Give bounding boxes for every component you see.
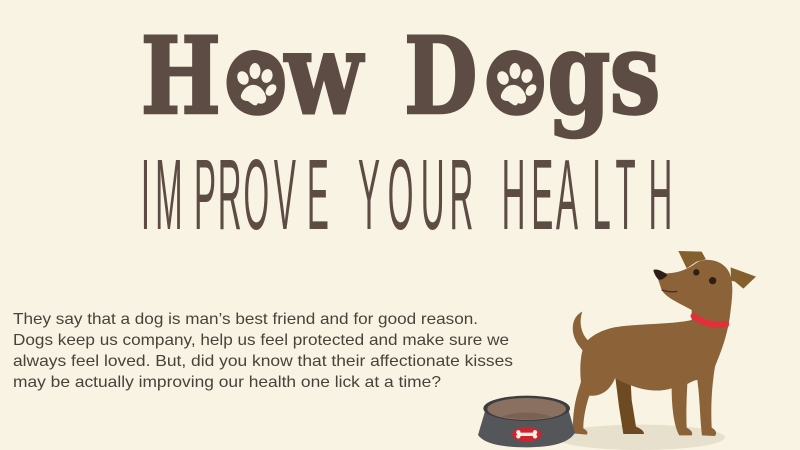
dog ear left — [678, 251, 706, 268]
dog nose — [653, 270, 667, 280]
intro paragraph — [13, 311, 513, 391]
subtitle: Improve Your Health: YOUR — [358, 139, 473, 250]
intro paragraph: Dogs keep us company, help us feel protected and make sure we — [13, 332, 509, 349]
icon: paw in second o — [486, 50, 542, 115]
dog bowl — [478, 396, 575, 447]
dog body — [573, 260, 732, 436]
illustration: dog and bowl — [478, 251, 756, 450]
bowl bone badge — [512, 427, 541, 442]
subtitle: Improve Your Health: IMPROVE — [141, 139, 329, 250]
dog mouth — [662, 290, 677, 292]
intro paragraph: may be actually improving our health one lick at a time? — [13, 374, 441, 391]
dog tail — [573, 312, 589, 353]
intro paragraph: always feel loved. But, did you know that their affectionate kisses — [13, 353, 513, 370]
icon: paw in first o — [226, 50, 282, 115]
ground shadow — [555, 425, 725, 450]
dog ear right — [731, 267, 756, 289]
dog collar — [694, 316, 726, 325]
dog eyes — [693, 269, 716, 284]
subtitle: Improve Your Health: HEALTH — [502, 139, 672, 250]
dog far back leg — [615, 375, 644, 434]
subtitle: Improve Your Health — [141, 139, 672, 250]
title: How Dogs: How Dogs — [141, 8, 660, 141]
intro paragraph: They say that a dog is man’s best friend and for good reason. — [13, 311, 478, 328]
